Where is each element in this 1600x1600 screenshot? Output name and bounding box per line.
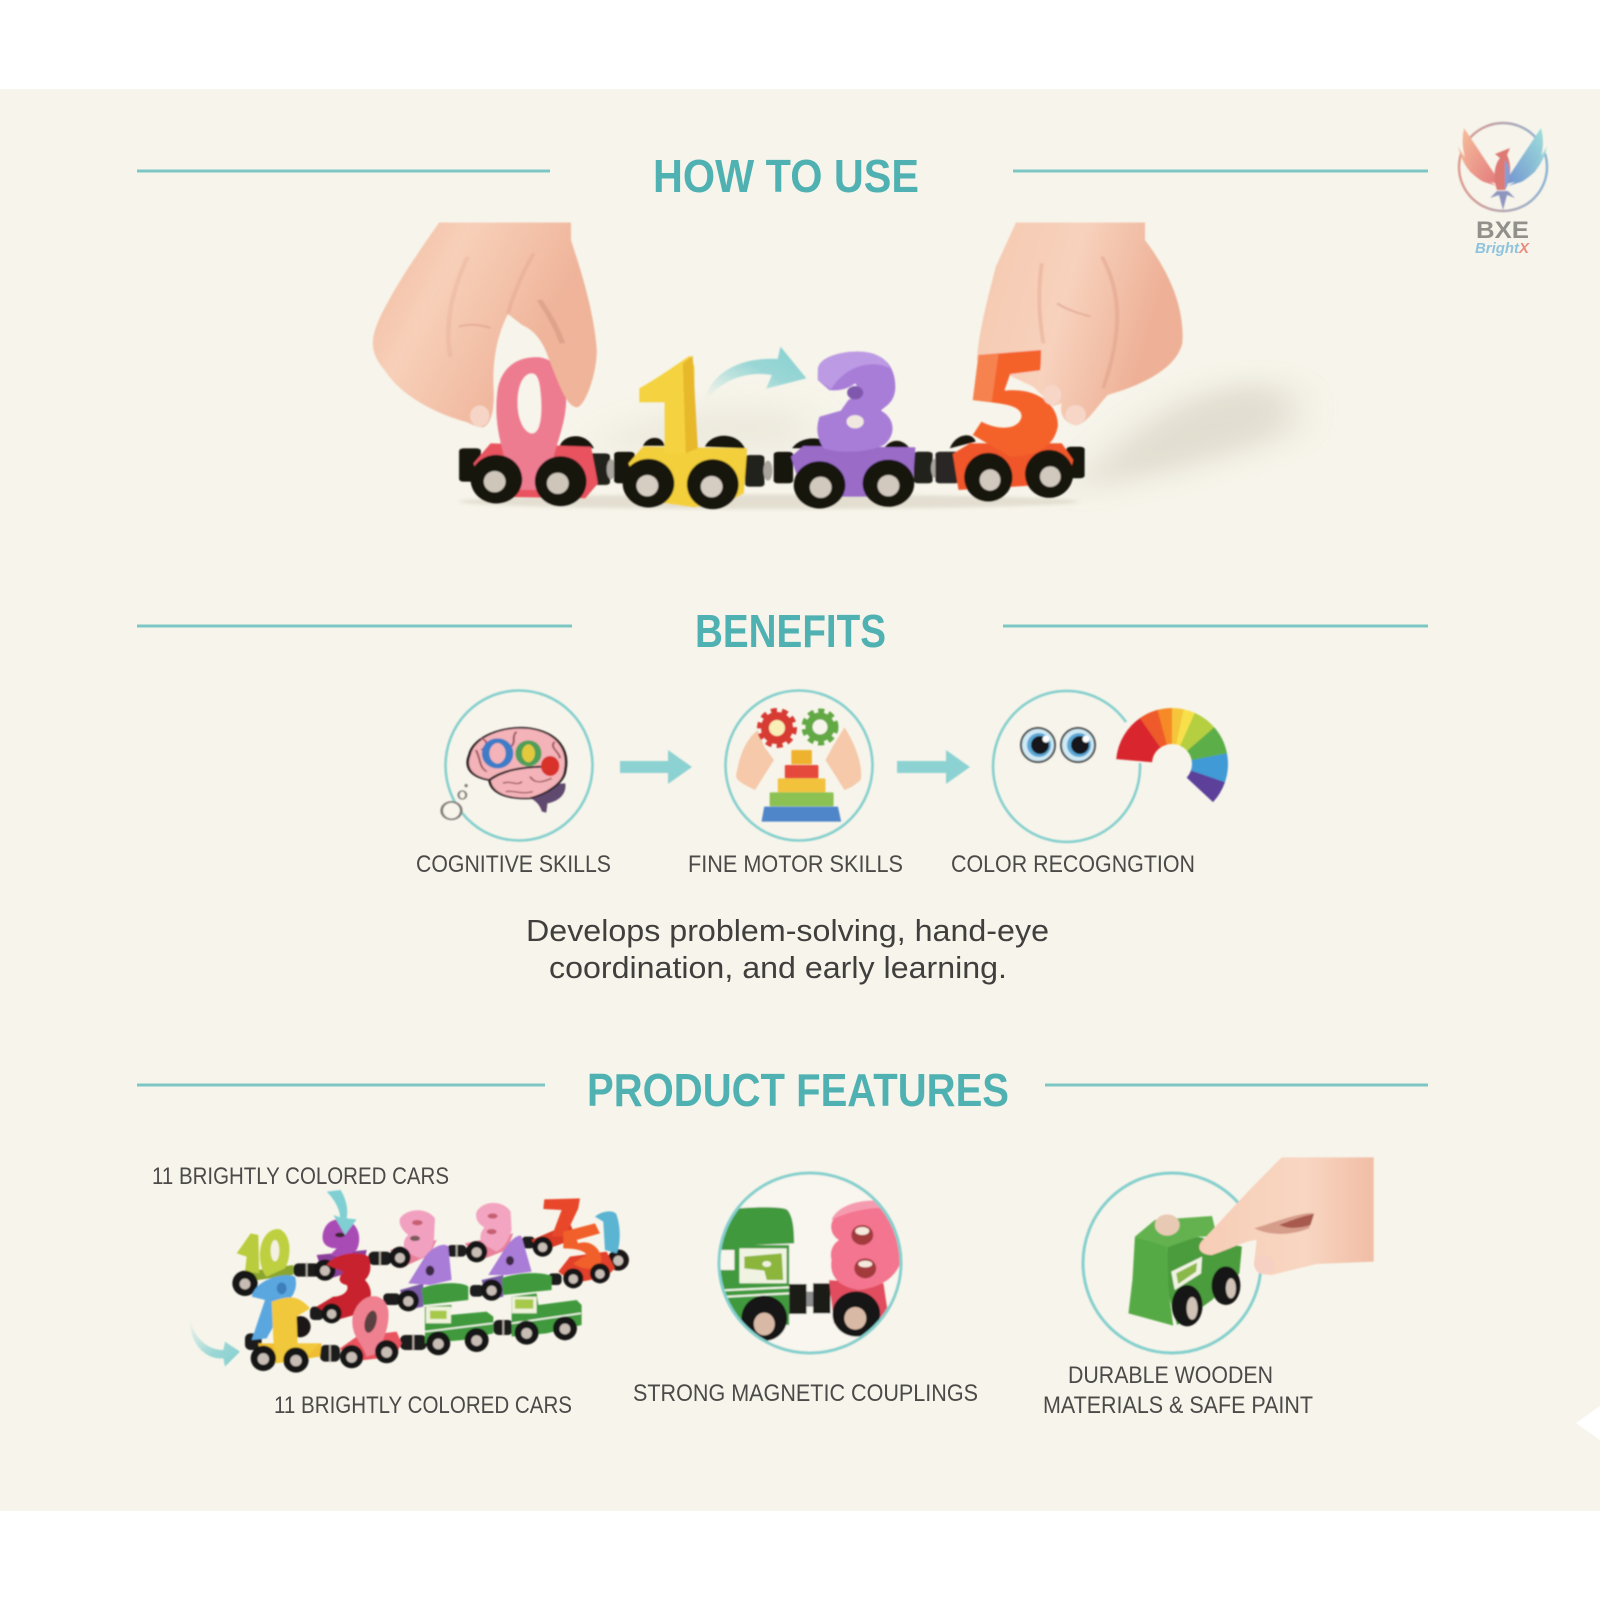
label: cars top: 11 BRIGHTLY COLORED CARS <box>152 1163 449 1190</box>
car 5 wheels <box>964 450 1073 502</box>
car 1: yellow <box>614 356 772 509</box>
car 8 <box>829 1201 904 1337</box>
car 4 right <box>481 1236 532 1301</box>
green train <box>715 1207 794 1325</box>
label: cars bottom: 11 BRIGHTLY COLORED CARS <box>274 1392 572 1419</box>
car 10 <box>232 1229 293 1296</box>
car 5 orange <box>558 1223 615 1288</box>
arrow: benefit 1 to 2 <box>620 750 692 784</box>
text block: benefits description <box>526 913 1049 985</box>
logo: BXE BrightX <box>1458 123 1548 257</box>
car 0 <box>340 1296 402 1368</box>
icon: eyes and color arc <box>993 691 1226 842</box>
logo wordmark: BXE <box>1476 217 1529 244</box>
right hand fingers <box>1039 257 1117 425</box>
section: benefits heading: BENEFITS <box>695 605 886 657</box>
car 8 right <box>465 1203 513 1262</box>
logo tagline: BrightX <box>1475 241 1530 257</box>
logo emblem <box>1458 123 1548 211</box>
car 4 left <box>398 1245 452 1311</box>
photo: eleven number cars <box>190 1190 629 1373</box>
icon: magnetic coupling close-up <box>715 1170 905 1360</box>
arrow: benefit 2 to 3 <box>897 750 970 784</box>
car 7 red <box>532 1198 580 1257</box>
car 3: purple <box>774 352 940 509</box>
icon: brain in thought bubble <box>442 690 592 840</box>
coupler <box>789 1283 830 1314</box>
green train right <box>502 1273 582 1345</box>
shadow <box>1062 383 1291 493</box>
green train left <box>422 1283 493 1355</box>
car 7 blue <box>252 1275 311 1340</box>
left hand <box>373 223 597 427</box>
car 8 left <box>389 1210 437 1268</box>
section: how to use heading: HOW TO USE <box>653 150 919 202</box>
label: cognitive skills: COGNITIVE SKILLS <box>416 851 611 878</box>
green wooden train <box>1128 1214 1242 1326</box>
icon: hands, gears and stacking tower <box>726 690 872 840</box>
car 5: orange <box>935 435 1085 490</box>
arrow: down <box>327 1190 357 1235</box>
car 1 yellow <box>251 1297 322 1373</box>
arrow: teal curved <box>706 347 806 397</box>
text block: benefits description: Develops problem-solving, hand-eye <box>526 913 1049 948</box>
label: fine motor skills: FINE MOTOR SKILLS <box>688 851 903 878</box>
text block: benefits description: coordination, and early learning. <box>549 950 1007 985</box>
number 5 <box>973 350 1058 457</box>
label: color recognition: COLOR RECOGNGTION <box>951 851 1195 878</box>
right hand <box>977 223 1183 425</box>
label: durable materials: MATERIALS & SAFE PAINT <box>1043 1392 1313 1419</box>
car 3 <box>317 1253 371 1323</box>
car 1 blue <box>595 1211 629 1271</box>
car 0: pink <box>459 357 616 506</box>
hand <box>1199 1157 1374 1275</box>
photo: hands placing number train cars <box>373 223 1291 509</box>
label: magnetic couplings: STRONG MAGNETIC COUPLINGS <box>633 1380 978 1407</box>
icon: wooden train with finger <box>1083 1157 1374 1353</box>
panel: benefit icons <box>442 690 1226 842</box>
label: durable materials <box>1043 1362 1313 1419</box>
couplers <box>245 1237 562 1362</box>
edge notch <box>1576 1406 1600 1440</box>
car 9 <box>314 1219 367 1281</box>
section: product features heading: PRODUCT FEATURES <box>587 1064 1009 1116</box>
arrow: left curved <box>190 1318 240 1367</box>
label: durable materials: DURABLE WOODEN <box>1068 1362 1273 1389</box>
